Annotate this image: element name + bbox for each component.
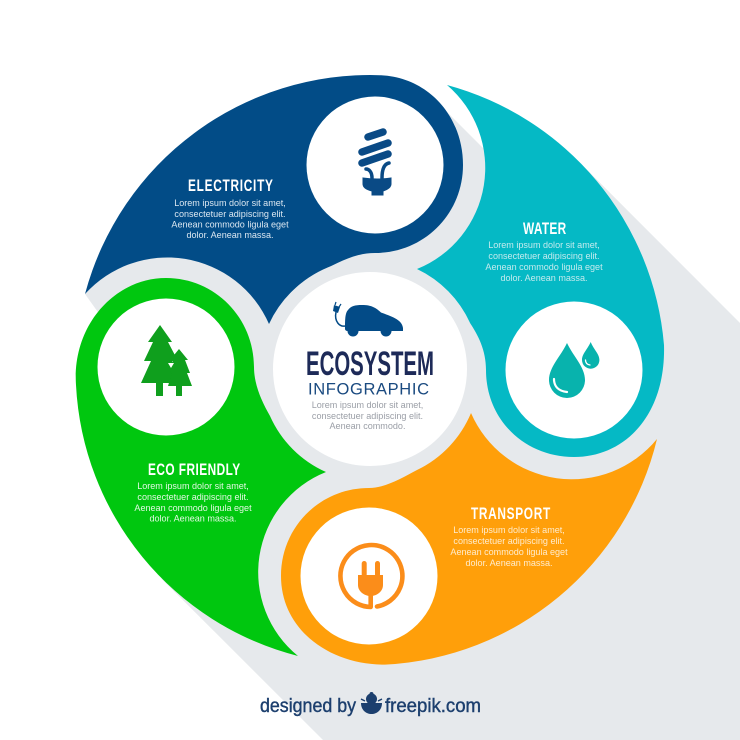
text: center: consectetuer adipiscing elit.: [312, 411, 423, 421]
icon: trees: [141, 325, 192, 396]
heading: transport: TRANSPORT: [471, 505, 550, 524]
petal: eco friendly: [76, 278, 326, 656]
text: water: Lorem ipsum dolor sit amet,: [488, 240, 600, 250]
subtitle: infographic: INFOGRAPHIC: [308, 380, 429, 398]
center disc: [273, 272, 467, 466]
petal: electricity: [85, 75, 463, 324]
text: eco friendly: Aenean commodo ligula eget: [134, 503, 252, 513]
heading: electricity: ELECTRICITY: [188, 177, 273, 196]
long diagonal shadow: [85, 102, 740, 740]
center ring: [260, 259, 480, 479]
icon circle: electricity: [306, 96, 444, 234]
heading: water: WATER: [523, 220, 567, 239]
panel: electricity: [85, 75, 463, 324]
footer: freepik credit: [260, 692, 481, 717]
brand text: freepik.com: [385, 696, 481, 717]
text: transport: Lorem ipsum dolor sit amet,: [453, 525, 565, 535]
text: eco friendly: Lorem ipsum dolor sit amet,: [137, 481, 249, 491]
icon: freepik logo: [361, 692, 382, 714]
panel: water: [417, 85, 664, 457]
text: electricity: Lorem ipsum dolor sit amet,: [174, 198, 286, 208]
icon: electric car: [333, 302, 403, 336]
text: center: Lorem ipsum dolor sit amet,: [312, 400, 423, 410]
heading: eco friendly: ECO FRIENDLY: [148, 461, 241, 480]
text: transport: consectetuer adipiscing elit.: [453, 536, 565, 546]
text: electricity: consectetuer adipiscing elit.: [174, 209, 286, 219]
icon circle: eco friendly: [98, 298, 234, 436]
title: ecosystem: ECOSYSTEM: [306, 345, 434, 383]
petal: transport: [281, 413, 657, 665]
text: electricity: dolor. Aenean massa.: [186, 230, 274, 240]
panel: eco friendly: [76, 278, 326, 656]
panel: transport: [281, 413, 657, 665]
text: eco friendly: dolor. Aenean massa.: [149, 514, 237, 524]
icon: water drops: [549, 342, 599, 398]
text: electricity: Aenean commodo ligula eget: [171, 220, 289, 230]
text: transport: Aenean commodo ligula eget: [450, 547, 568, 557]
text: transport: dolor. Aenean massa.: [465, 558, 553, 568]
panel: center: [260, 259, 480, 479]
credit text: designed by: [260, 696, 356, 717]
text: eco friendly: consectetuer adipiscing elit.: [137, 492, 249, 502]
text: water: consectetuer adipiscing elit.: [488, 251, 600, 261]
icon: power plug: [340, 545, 402, 607]
icon circle: water: [506, 302, 642, 438]
icon circle: transport: [300, 508, 438, 644]
icon: light bulb: [362, 132, 391, 195]
petal: water: [417, 85, 664, 457]
text: center: Aenean commodo.: [330, 421, 405, 431]
text: water: dolor. Aenean massa.: [500, 273, 588, 283]
text: water: Aenean commodo ligula eget: [485, 262, 603, 272]
